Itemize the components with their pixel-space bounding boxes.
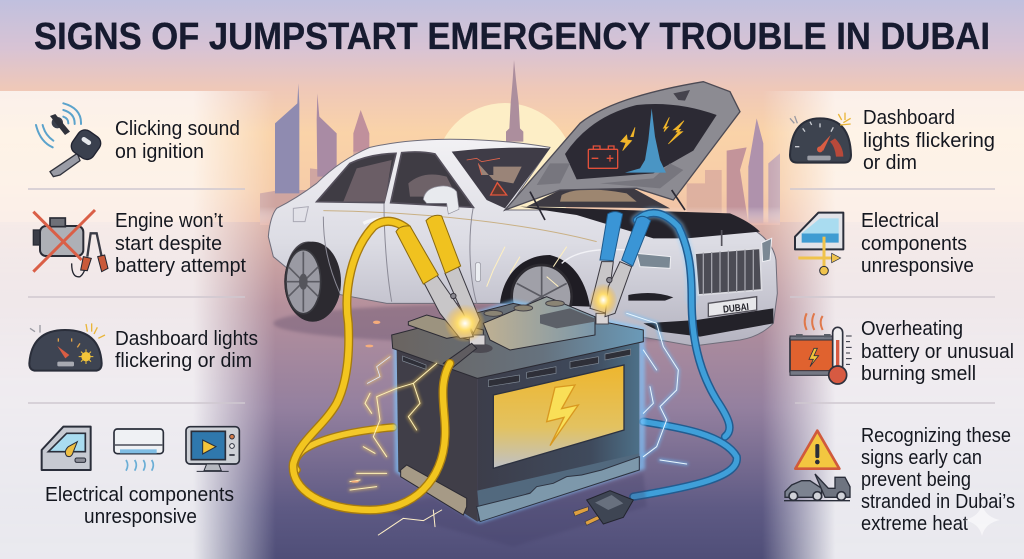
battery glow	[397, 303, 642, 520]
number plate: DUBAI	[722, 302, 750, 316]
text: overheating battery: battery or unusual	[861, 341, 1014, 363]
text: recognizing signs: signs early can	[861, 447, 982, 469]
icon: flickering gauge	[29, 323, 105, 371]
watermark sparkle	[964, 504, 1000, 536]
text: electrical components: components	[861, 233, 967, 255]
yellow clamp jaws	[423, 267, 480, 338]
text: clicking sound	[115, 118, 240, 163]
top face	[392, 303, 643, 378]
item: engine won't start	[33, 210, 246, 277]
icon: gauge	[790, 113, 851, 163]
item: electrical components	[795, 210, 974, 277]
windshield view under hood	[527, 188, 670, 208]
text: electrical components	[861, 210, 974, 277]
item: recognizing signs	[784, 425, 1015, 535]
vent slots	[403, 349, 631, 387]
hood tower sketch	[625, 108, 666, 173]
text: dashboard lights	[115, 328, 258, 372]
hood lightning	[621, 117, 684, 151]
interior seen under hood	[560, 190, 637, 202]
text: overheating battery: burning smell	[861, 363, 976, 385]
side face	[397, 348, 477, 522]
battery base	[477, 453, 639, 522]
text: overheating battery: Overheating	[861, 318, 963, 340]
icon: car door window	[42, 427, 91, 470]
text: recognizing signs: extreme heat	[861, 513, 968, 535]
panel backdrop: left	[0, 91, 276, 559]
text: dashboard lights: lights flickering	[863, 130, 995, 152]
jumper clamps	[396, 212, 651, 343]
text: dashboard lights	[863, 107, 995, 174]
mirror	[423, 186, 459, 214]
right panel	[784, 107, 1015, 535]
cables behind battery	[295, 213, 737, 497]
blue cable glow	[637, 213, 692, 300]
label bolt	[547, 385, 578, 446]
car	[268, 82, 777, 346]
background: ground	[0, 222, 1024, 559]
sun	[435, 103, 575, 243]
item: electrical components	[42, 427, 239, 528]
top centre lid	[483, 297, 595, 350]
left panel	[29, 103, 258, 528]
text: electrical components: unresponsive	[84, 506, 197, 528]
contact sparks	[444, 247, 617, 343]
icon: battery and thermometer	[790, 313, 852, 384]
blue cable	[633, 213, 737, 497]
windshield with warning symbols	[452, 148, 550, 208]
icon: air conditioner	[114, 429, 163, 471]
lid caps	[484, 300, 564, 316]
windows	[317, 152, 473, 207]
text: engine won't start: battery attempt	[115, 255, 246, 277]
headlights	[637, 238, 772, 268]
text: recognizing signs: prevent being	[861, 469, 971, 491]
battery label	[493, 365, 624, 468]
text: engine won't start: start despite	[115, 233, 222, 255]
item: clicking sound	[36, 103, 240, 177]
icon: warning triangle	[795, 431, 839, 469]
icon: monitor with play button	[186, 427, 239, 471]
rear wheel	[284, 242, 341, 322]
battery side foot	[401, 465, 467, 515]
terminals	[443, 313, 608, 368]
open hood	[505, 82, 740, 220]
text: dashboard lights: Dashboard	[863, 107, 955, 129]
car body	[268, 139, 777, 346]
background: sky	[0, 0, 1024, 222]
hood battery symbol	[588, 146, 618, 168]
text: clicking sound: on ignition	[115, 141, 204, 163]
number plate	[708, 297, 757, 317]
text: engine won't start	[115, 210, 246, 277]
skyline	[260, 60, 780, 225]
item: dashboard lights	[790, 107, 995, 174]
text: electrical components: Electrical components	[45, 484, 234, 506]
front face	[477, 343, 639, 522]
plug	[573, 491, 633, 525]
rear tyre	[284, 242, 341, 322]
battery	[293, 221, 687, 547]
item: overheating battery	[790, 313, 1014, 385]
front wheel	[500, 255, 590, 328]
blue clamp handles	[600, 212, 651, 266]
yellow clamp handles	[396, 215, 461, 284]
text: electrical components: Electrical	[861, 210, 939, 232]
text: recognizing signs: Recognizing these	[861, 425, 1011, 447]
yellow cable tail	[295, 427, 393, 470]
panel backdrop: right	[762, 91, 1024, 559]
icon: key with sound waves	[36, 103, 104, 177]
hood strut	[530, 190, 685, 220]
text: overheating battery	[861, 318, 1014, 385]
text: engine won't start: Engine won’t	[115, 210, 223, 232]
door seams and trim	[293, 203, 627, 303]
text: dashboard lights: or dim	[863, 152, 917, 174]
item: dashboard lights	[29, 323, 258, 372]
battery floor shadow	[380, 473, 647, 547]
icon: tow truck	[784, 474, 850, 501]
text: recognizing signs	[861, 425, 1015, 535]
icon: crossed engine and clamps	[33, 210, 108, 277]
text: clicking sound: Clicking sound	[115, 118, 240, 140]
text: electrical components	[45, 484, 234, 528]
text: electrical components: unresponsive	[861, 255, 974, 277]
engine bay	[520, 207, 760, 238]
yellow cable in front of battery	[293, 221, 450, 510]
lower intake	[628, 293, 773, 337]
floor sparks	[351, 321, 380, 483]
blue clamp jaws	[590, 262, 632, 317]
car shadow	[273, 303, 767, 343]
lightning	[350, 313, 687, 535]
text: dashboard lights: flickering or dim	[115, 350, 252, 372]
top left lid	[408, 315, 483, 343]
text: dashboard lights: Dashboard lights	[115, 328, 258, 350]
icon: door window with arrow	[795, 213, 843, 275]
grille	[695, 230, 762, 295]
